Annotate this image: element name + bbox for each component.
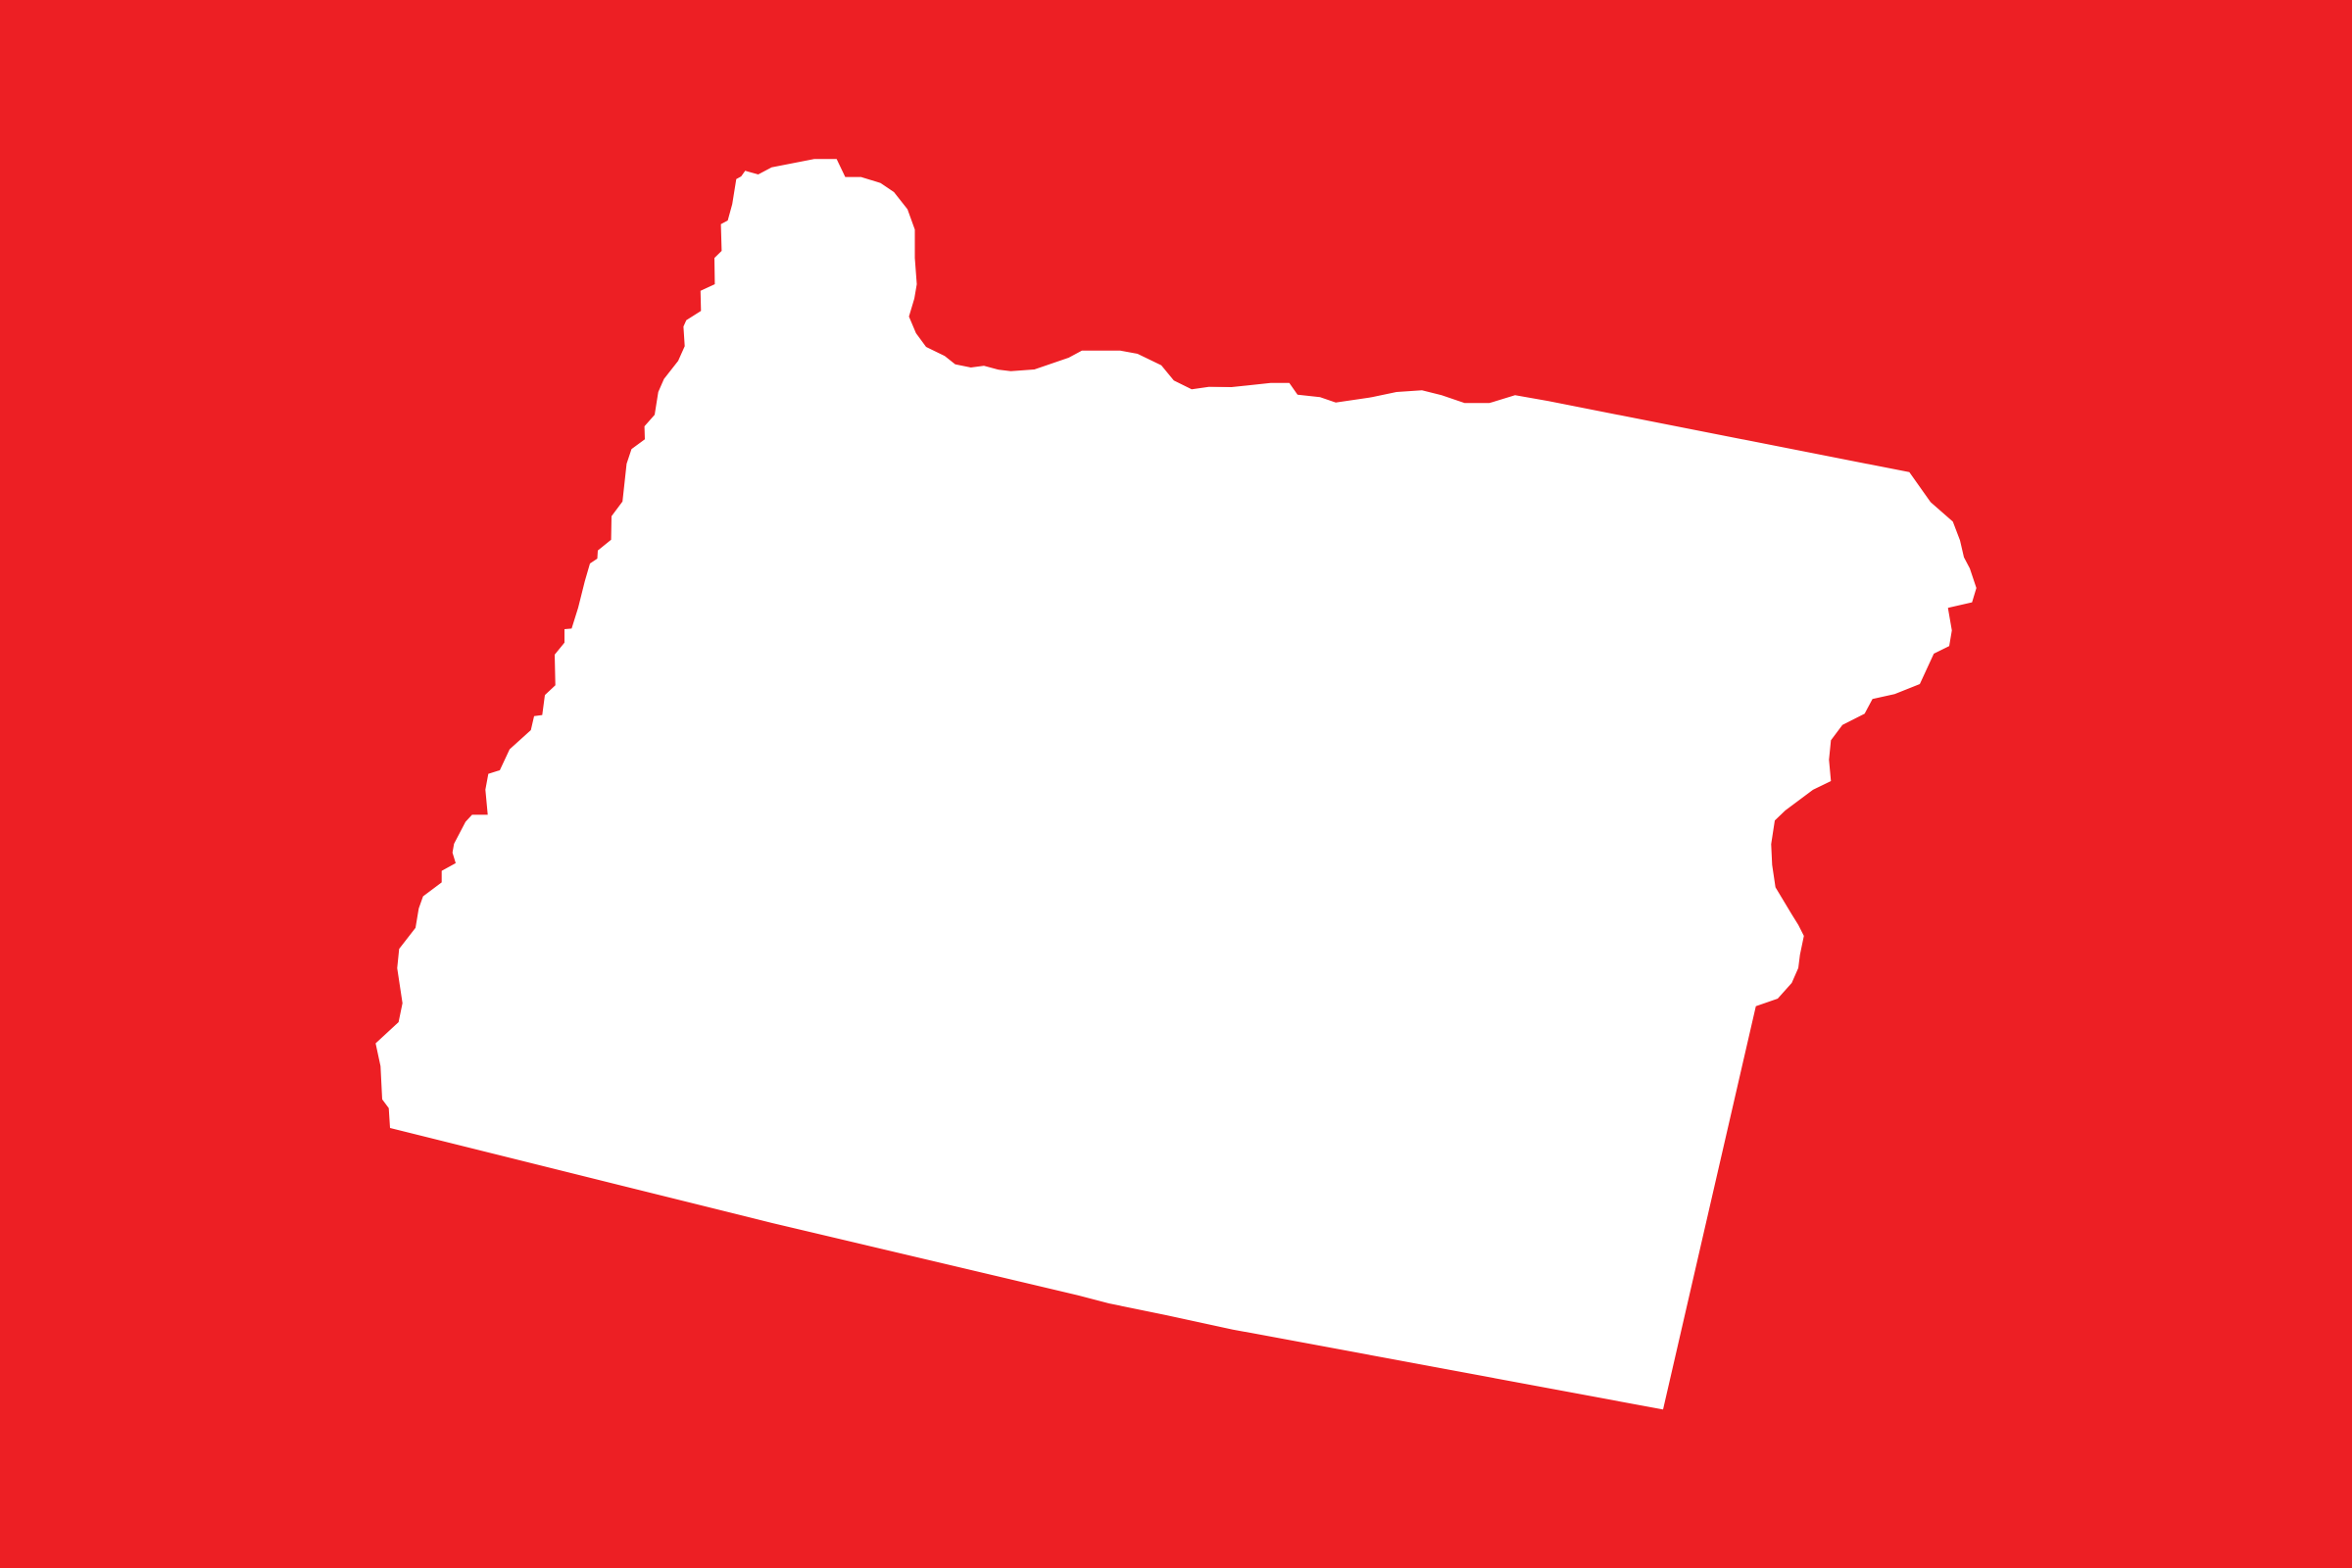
icon: white silhouette of Oregon — [375, 159, 1977, 1409]
